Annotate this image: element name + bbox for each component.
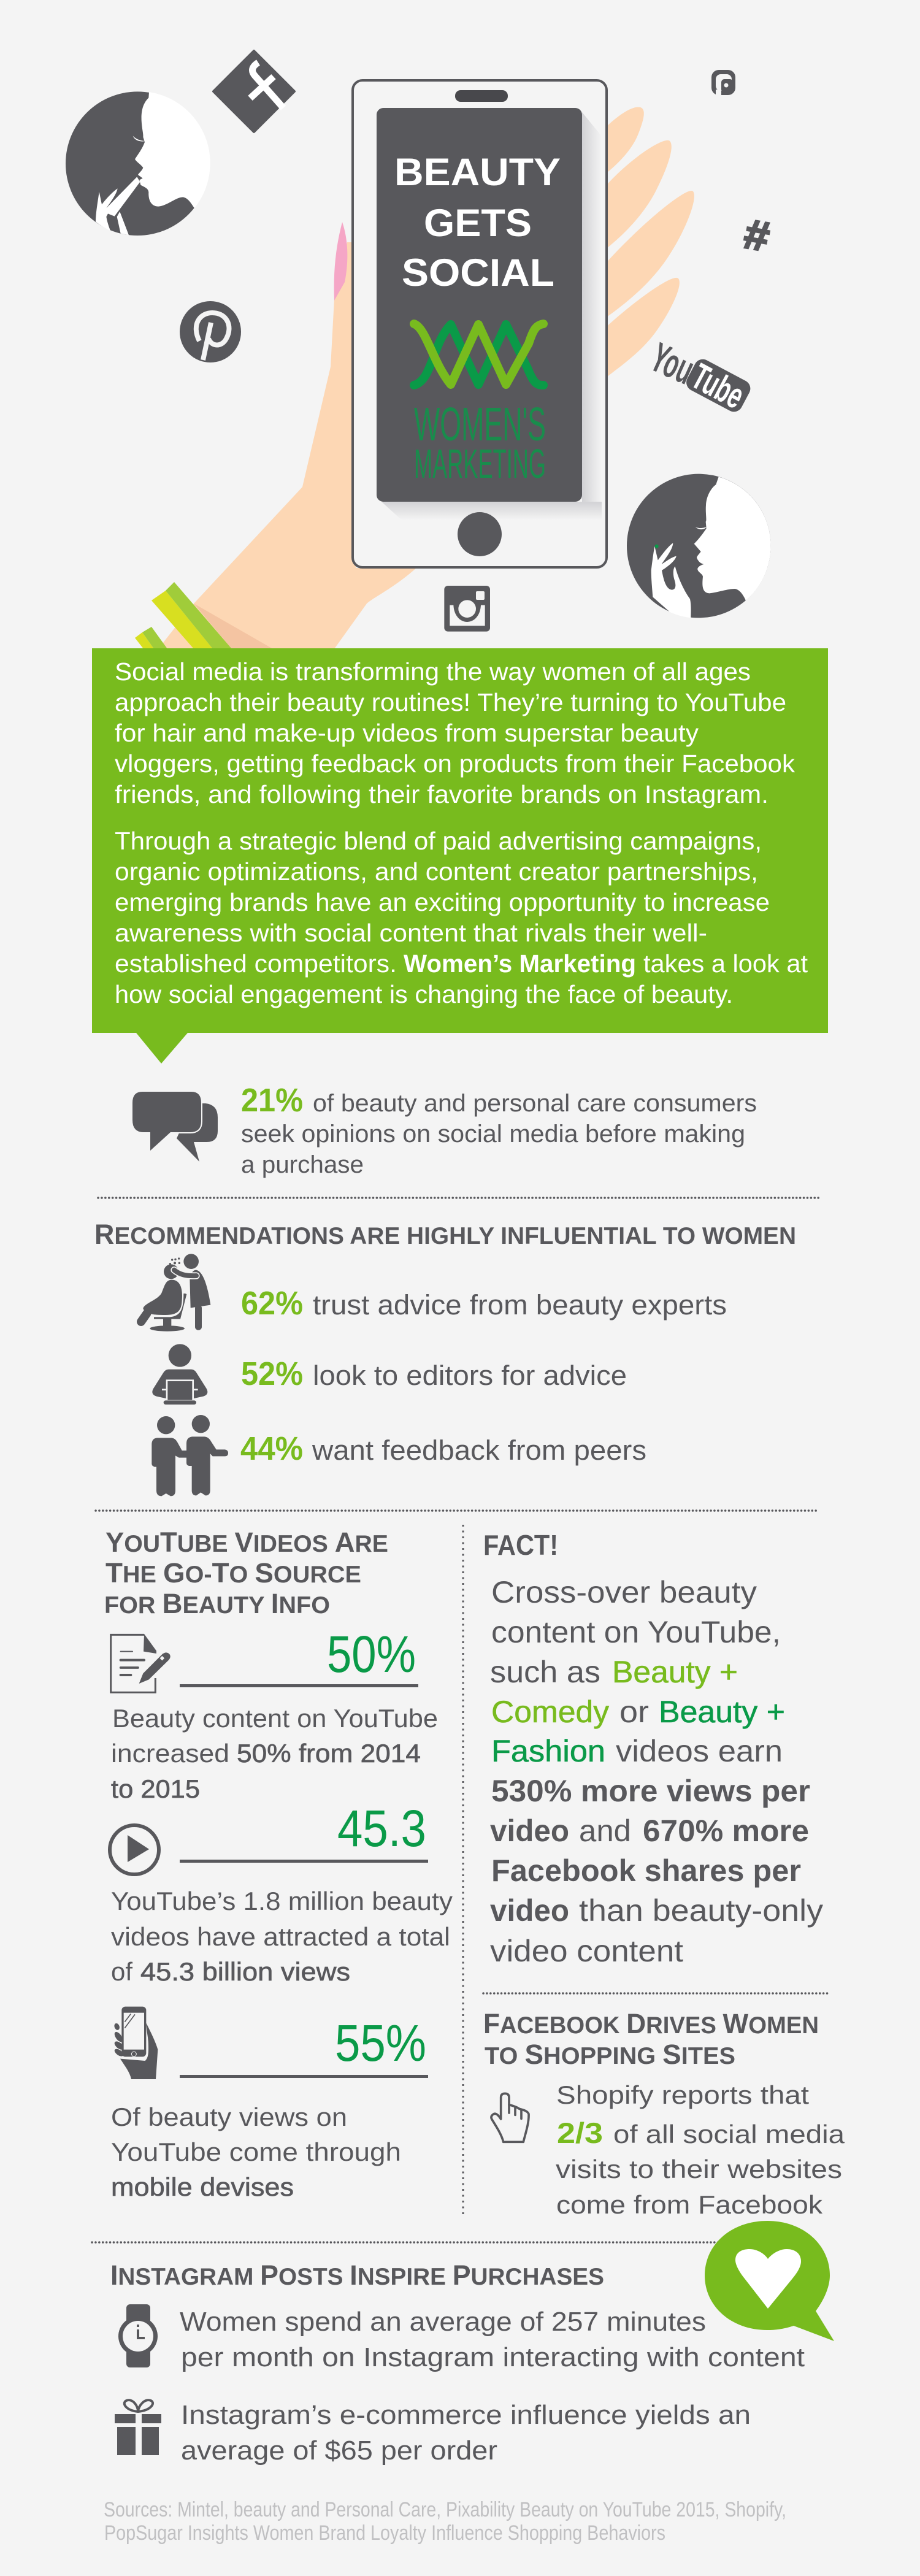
icon: gift: [115, 2400, 161, 2455]
heading: youtube videos: YOUTUBE VIDEOS ARE: [105, 1527, 388, 1558]
text: cross-over fact: Facebook shares per: [491, 1853, 801, 1888]
stat: 21 percent: seek opinions on social media before making: [241, 1121, 745, 1148]
stat: 44 percent: [240, 1430, 646, 1467]
text: 55 percent description: [111, 2103, 401, 2201]
paragraph 1: vloggers, getting feedback on products from their Facebook: [115, 749, 795, 778]
text: 45.3 description: videos have attracted a total: [111, 1922, 450, 1951]
text: cross-over fact: 670% more: [643, 1814, 809, 1848]
text: minutes on instagram: Women spend an average of 257 minutes: [180, 2307, 706, 2337]
phone screen: [377, 108, 582, 502]
title: GETS: [424, 202, 532, 245]
text: cross-over fact: or: [619, 1695, 649, 1729]
stat: 52 percent: [241, 1355, 627, 1392]
text: cross-over fact: Cross-over beauty: [491, 1575, 757, 1609]
icon: youtube: Tube: [685, 356, 751, 416]
icon: editor: [152, 1344, 207, 1405]
stat: 21 percent: [241, 1082, 757, 1178]
text: cross-over fact: than beauty-only: [579, 1893, 823, 1928]
paragraph 2: Women’s Marketing: [404, 949, 636, 978]
stat: 50 percent: 50%: [327, 1625, 416, 1683]
icon: pointing hand: [491, 2093, 529, 2142]
stat: 44 percent: 44%: [240, 1430, 303, 1467]
heading: youtube videos: [104, 1527, 388, 1619]
heading: facebook drives women: TO SHOPPING SITES: [485, 2039, 735, 2070]
stat: 62 percent: 62%: [241, 1285, 303, 1322]
text: minutes on instagram: per month on Instagram interacting with content: [181, 2342, 805, 2372]
text: 50 percent description: 50% from 2014: [237, 1739, 421, 1768]
icon: woman touching face: [627, 474, 771, 618]
stat: 45.3: [180, 1800, 428, 1863]
text: cross-over fact: Beauty +: [659, 1695, 785, 1729]
icon: hand holding phone: [113, 2007, 158, 2079]
paragraph 1: [115, 657, 795, 808]
text: cross-over fact: videos earn: [616, 1734, 783, 1768]
stat: 52 percent: 52%: [241, 1355, 303, 1392]
heading: instagram posts: INSTAGRAM POSTS INSPIRE PURCHASES: [110, 2260, 604, 2291]
text: shopify fact: visits to their websites: [556, 2155, 842, 2183]
icon: pinterest: [180, 301, 241, 362]
thumb nail: [334, 222, 347, 301]
text: cross-over fact: Beauty +: [612, 1655, 738, 1689]
paragraph 2: how social engagement is changing the face of beauty.: [115, 980, 733, 1008]
icon: document and pencil: [111, 1634, 171, 1692]
text: 55 percent description: YouTube come through: [111, 2137, 401, 2166]
bracelets: [135, 582, 232, 649]
icon: facebook: [213, 51, 294, 132]
icon: youtube: You: [644, 334, 701, 393]
text: shopify fact: 2/3: [557, 2117, 603, 2149]
panel: intro: [92, 648, 828, 1064]
paragraph 1: for hair and make-up videos from superstar beauty: [115, 719, 699, 747]
text: 50 percent description: increased: [111, 1739, 229, 1768]
text: 45.3 description: of: [111, 1957, 132, 1986]
stat: 50 percent: [180, 1625, 418, 1687]
paragraph 2: awareness with social content that rivals their well-: [115, 919, 707, 947]
icon: instagram: [444, 586, 490, 632]
phone body: [353, 80, 607, 567]
stat: 62 percent: trust advice from beauty experts: [313, 1289, 727, 1321]
text: cross-over fact: such as: [490, 1655, 600, 1689]
text: e-commerce influence: Instagram’s e-commerce influence yields an: [181, 2400, 751, 2430]
icon: play button: [110, 1825, 159, 1874]
heading: fact: FACT!: [483, 1529, 558, 1561]
title: BEAUTY: [394, 151, 561, 194]
text: cross-over fact: and: [579, 1814, 631, 1848]
text: shopify fact: of all social media: [613, 2120, 845, 2149]
home button: [458, 512, 502, 556]
text: cross-over fact: [490, 1575, 823, 1968]
text: cross-over fact: video: [490, 1893, 569, 1928]
stat: 55 percent: 55%: [335, 2014, 426, 2072]
logo wordmark: MARKETING: [414, 441, 546, 487]
text: 55 percent description: Of beauty views on: [111, 2103, 347, 2131]
stat: 52 percent: look to editors for advice: [313, 1360, 627, 1391]
text: cross-over fact: video: [490, 1814, 569, 1848]
sources: PopSugar Insights Women Brand Loyalty Influence Shopping Behaviors: [104, 2521, 665, 2545]
paragraph 1: approach their beauty routines! They’re turning to YouTube: [115, 688, 786, 716]
paragraph 1: friends, and following their favorite brands on Instagram.: [115, 780, 769, 808]
stat: 62 percent: [241, 1285, 727, 1322]
logo mark: [414, 324, 543, 385]
text: 50 percent description: Beauty content on YouTube: [112, 1704, 438, 1733]
stat: 21 percent: a purchase: [241, 1151, 364, 1178]
paragraph 2: Through a strategic blend of paid advertising campaigns,: [115, 827, 762, 855]
panel pointer: [136, 1033, 188, 1064]
paragraph 2: takes a look at: [643, 949, 808, 978]
title: SOCIAL: [402, 251, 554, 294]
text: e-commerce influence: average of $65 per order: [181, 2436, 497, 2466]
text: 55 percent description: mobile devises: [111, 2172, 294, 2201]
text: cross-over fact: Comedy: [491, 1695, 609, 1729]
text: e-commerce influence: [181, 2400, 751, 2466]
icon: peers: [151, 1415, 228, 1496]
text: 45.3 description: 45.3 billion views: [140, 1957, 350, 1986]
text: cross-over fact: 530% more views per: [491, 1774, 810, 1808]
text: cross-over fact: Fashion: [491, 1734, 605, 1768]
screen shadow: [381, 112, 602, 520]
paragraph 2: organic optimizations, and content creator partnerships,: [115, 857, 758, 886]
illustration: hand holding phone: [135, 80, 694, 649]
icon: watch: [118, 2304, 158, 2367]
sources: Sources: Mintel, beauty and Personal Care, Pixability Beauty on YouTube 2015, Shopify,: [104, 2498, 786, 2521]
stat: 45.3: 45.3: [337, 1800, 426, 1857]
logo wordmark: WOMEN'S: [414, 398, 546, 451]
stat: 21 percent: of beauty and personal care consumers: [313, 1090, 757, 1117]
icon: chat bubbles: [132, 1092, 218, 1162]
icon: hashtag: #: [741, 210, 773, 261]
stat: 55 percent: [180, 2014, 428, 2078]
paragraph 2: established competitors.: [115, 949, 397, 978]
text: shopify fact: come from Facebook: [556, 2190, 823, 2219]
text: 50 percent description: [111, 1704, 438, 1803]
logo wordmark: [414, 398, 546, 487]
text: shopify fact: Shopify reports that: [556, 2080, 809, 2109]
text: 45.3 description: YouTube’s 1.8 million beauty: [111, 1887, 453, 1915]
stat: 21 percent: 21%: [241, 1082, 303, 1119]
icon: woman applying lipstick: [66, 91, 210, 236]
text: minutes on instagram: [180, 2307, 805, 2372]
hand and fingers: [158, 107, 694, 649]
heading: facebook drives women: FACEBOOK DRIVES WOMEN: [483, 2008, 819, 2039]
title: [394, 151, 561, 294]
text: cross-over fact: video content: [490, 1934, 683, 1968]
heading: recommendations: RECOMMENDATIONS ARE HIGHLY INFLUENTIAL TO WOMEN: [94, 1219, 796, 1250]
icon: stylist: [141, 1254, 210, 1332]
phone speaker: [455, 90, 508, 102]
text: cross-over fact: content on YouTube,: [491, 1615, 781, 1649]
text: shopify fact: [556, 2080, 845, 2219]
sources: [104, 2498, 786, 2545]
stat: 44 percent: want feedback from peers: [312, 1435, 646, 1466]
paragraph 2: [115, 827, 808, 1008]
icon: at sign: [711, 70, 735, 95]
heading: youtube videos: THE GO-TO SOURCE: [105, 1557, 361, 1589]
text: 45.3 description: [111, 1887, 453, 1986]
paragraph 1: Social media is transforming the way women of all ages: [115, 657, 751, 686]
heading: facebook drives women: [483, 2008, 819, 2070]
text: 50 percent description: to 2015: [111, 1774, 200, 1803]
heading: youtube videos: FOR BEAUTY INFO: [104, 1588, 330, 1619]
icon: heart speech bubble: [705, 2221, 834, 2341]
paragraph 2: emerging brands have an exciting opportunity to increase: [115, 888, 770, 916]
